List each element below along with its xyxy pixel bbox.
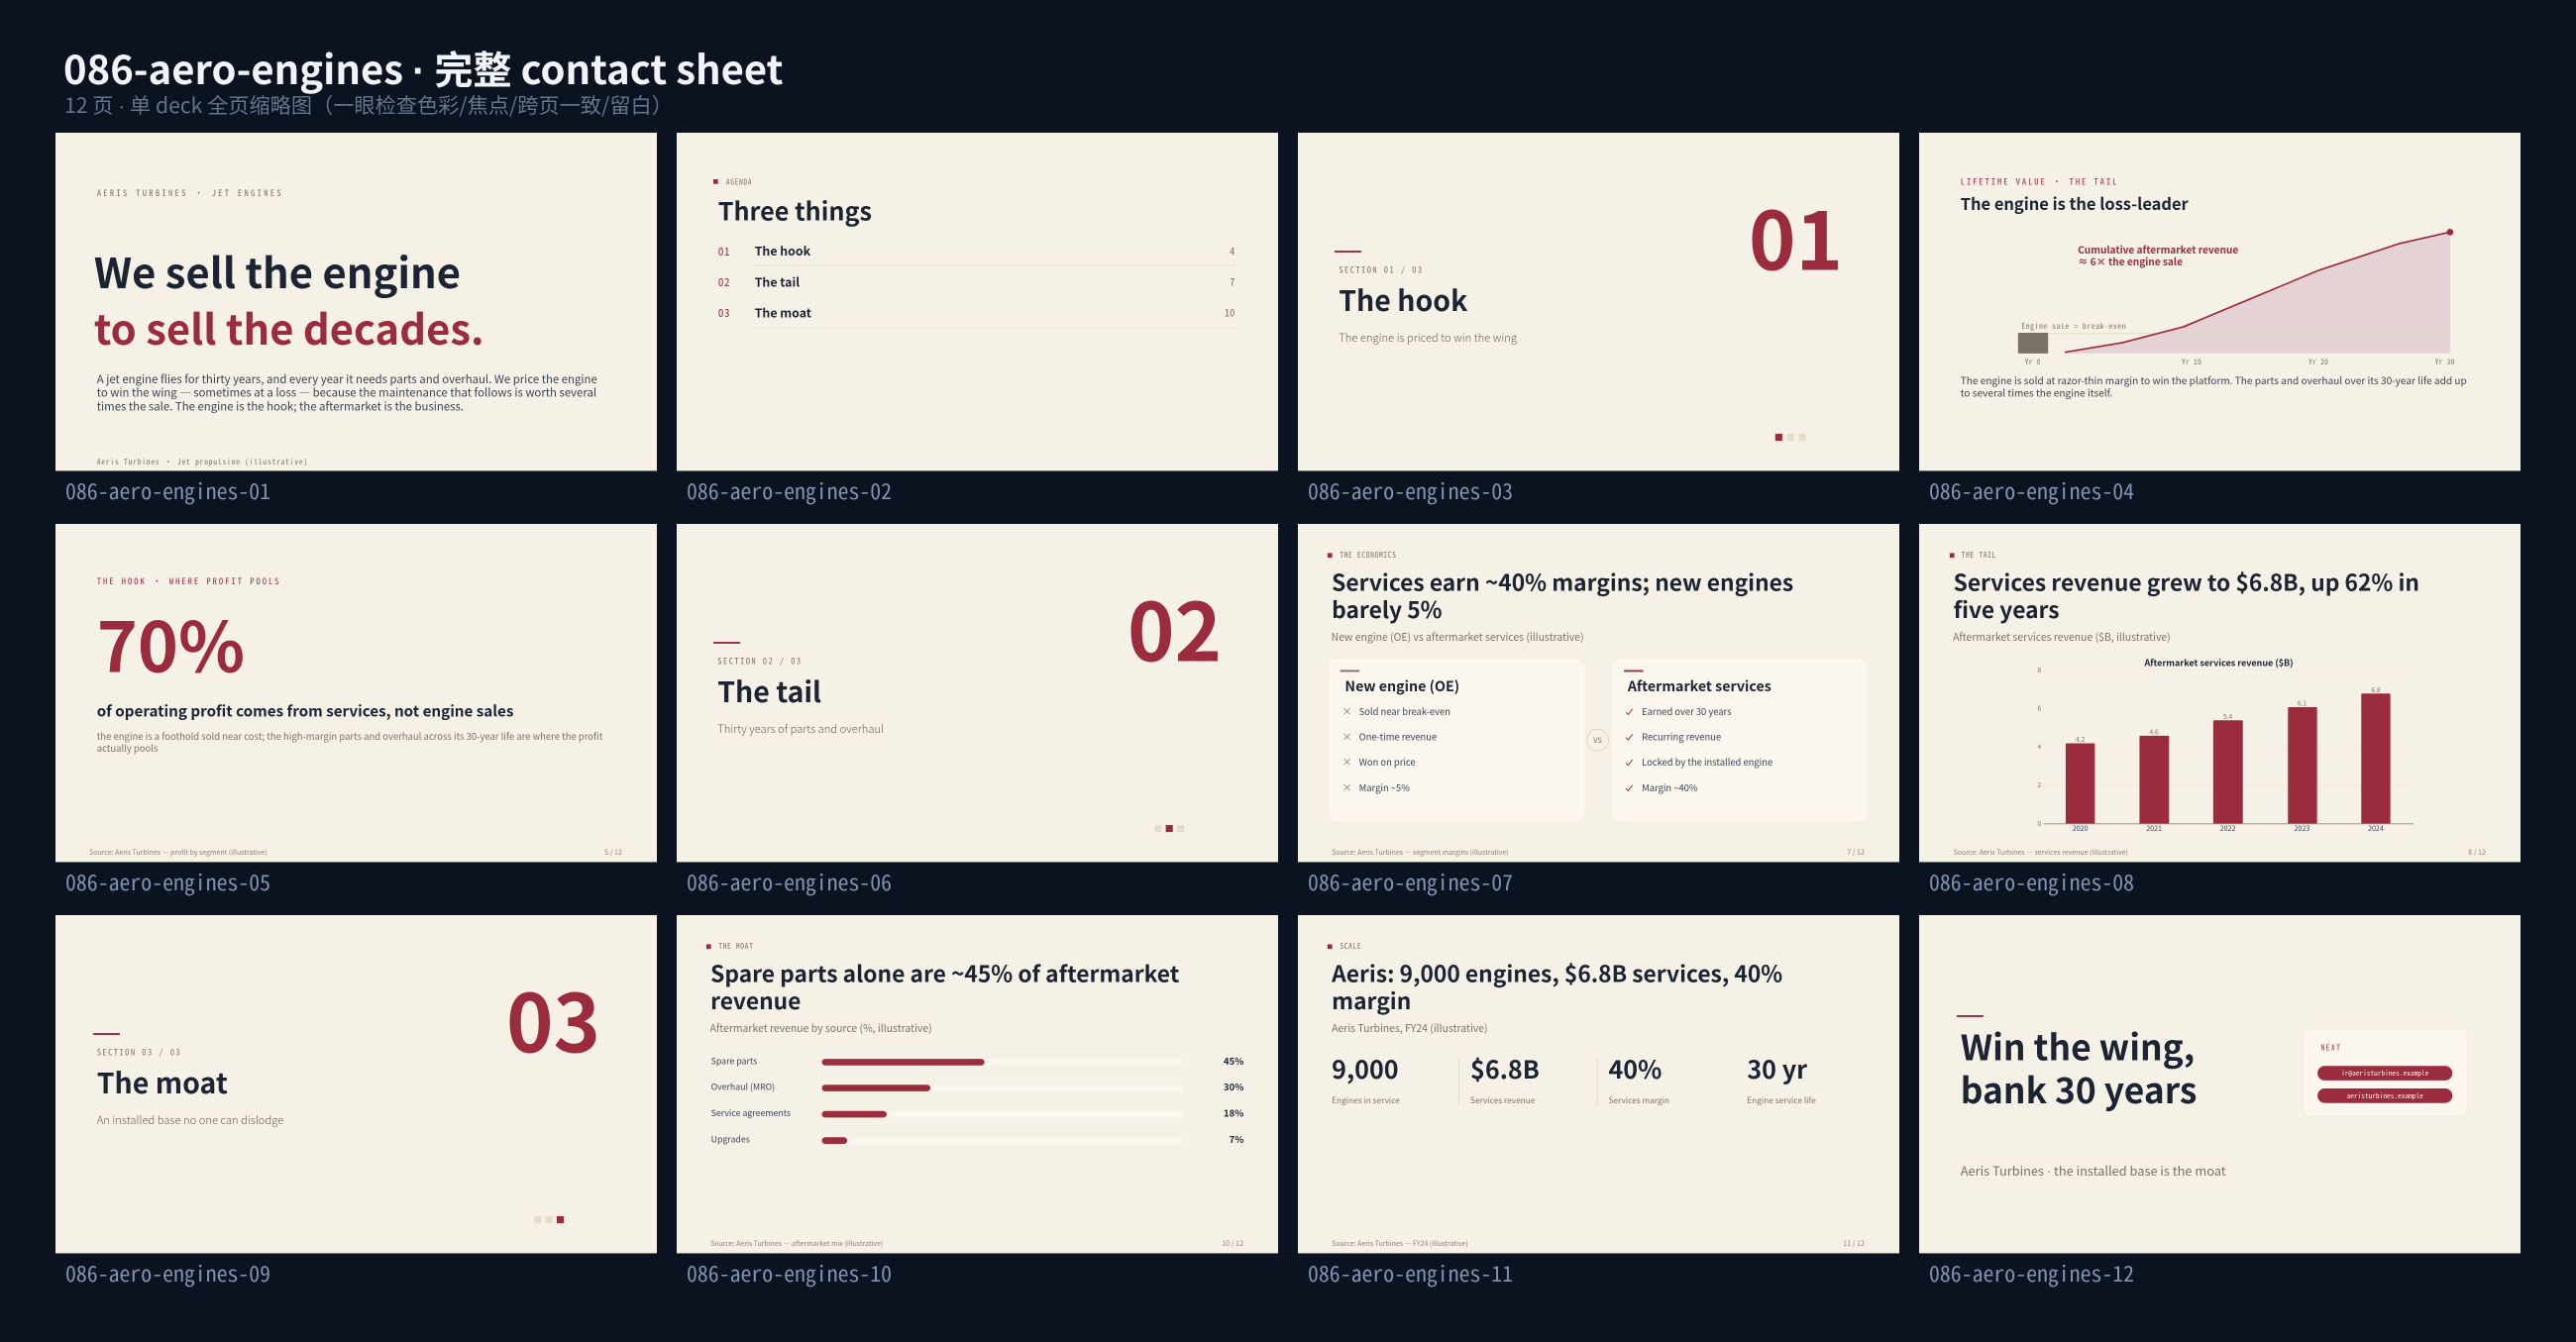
intro paragraph: times the sale. The engine is the hook; the aftermarket is the business. — [97, 397, 464, 414]
eyebrow marker — [1328, 553, 1333, 558]
card accent — [1624, 670, 1644, 671]
source: Source: Aeris Turbines — services revenue (illustrative) — [1954, 847, 2128, 857]
contact pill: web: aeristurbines.example — [2347, 1090, 2423, 1100]
bar chart: 4.6 — [2150, 726, 2159, 736]
progress dots — [534, 1216, 565, 1224]
card accent — [1341, 670, 1359, 671]
eyebrow: THE ECONOMICS — [1340, 549, 1397, 561]
heading — [1332, 565, 1793, 625]
stat: revenue: Services revenue — [1470, 1094, 1535, 1106]
intro paragraph: to win the wing — sometimes at a loss — because the maintenance that follows is worth several — [97, 383, 596, 400]
heading — [710, 956, 1179, 1016]
eyebrow marker — [713, 179, 718, 184]
caption 01: 086-aero-engines-01 — [65, 475, 270, 505]
page number: 8 / 12 — [2468, 847, 2486, 857]
subtitle: 12 页 · 单 deck 全页缩略图（一眼检查色彩/焦点/跨页一致/留白） — [64, 89, 673, 120]
panel: slide 09 section — [55, 915, 657, 1253]
headline — [94, 241, 484, 357]
stat detail: the engine is a foothold sold near cost; the high-margin parts and overhaul across its 30-year life are where the profit — [97, 729, 602, 743]
section label: SECTION 02 / 03 — [717, 655, 803, 667]
section label: SECTION 03 / 03 — [97, 1046, 181, 1058]
section title: The hook — [1339, 278, 1467, 320]
next label: NEXT — [2320, 1042, 2341, 1053]
name: The hook — [755, 242, 810, 259]
caption 02: 086-aero-engines-02 — [687, 475, 892, 505]
stat: revenue: $6.8B — [1470, 1051, 1540, 1086]
page: 10 — [1225, 305, 1234, 320]
heading: Three things — [718, 192, 872, 228]
heading: Services revenue grew to $6.8B, up 62% in — [1954, 565, 2419, 597]
closing headline: Win the wing, — [1961, 1020, 2195, 1071]
area chart: Yr 30 — [2435, 357, 2455, 367]
area chart: ≈ 6× the engine sale — [2078, 254, 2183, 268]
heading — [1332, 956, 1782, 1016]
bar row: overhaul: Overhaul (MRO) — [711, 1081, 775, 1092]
panel: slide 11 key stats — [1298, 915, 1899, 1253]
list item: Locked by the installed engine — [1642, 755, 1772, 769]
eyebrow marker — [706, 944, 711, 949]
bar row: spare parts: 45% — [1224, 1054, 1243, 1068]
intro paragraph: A jet engine flies for thirty years, and every year it needs parts and overhaul. We price the engine — [97, 369, 597, 386]
section subtitle: The engine is priced to win the wing — [1339, 329, 1517, 345]
title: 086-aero-engines · 完整 contact sheet — [63, 39, 783, 96]
eyebrow: LIFETIME VALUE · THE TAIL — [1961, 175, 2118, 187]
list item: Sold near break-even — [1359, 704, 1450, 718]
source: Source: Aeris Turbines — aftermarket mix (illustrative) — [710, 1238, 883, 1248]
big number: 70% — [97, 592, 245, 692]
stat: engines: 9,000 — [1332, 1051, 1399, 1086]
stat: life: 30 yr — [1747, 1051, 1807, 1086]
source: Source: Aeris Turbines — profit by segment (illustrative) — [89, 847, 268, 857]
eyebrow: THE HOOK · WHERE PROFIT POOLS — [97, 575, 281, 587]
caption 04: 086-aero-engines-04 — [1929, 475, 2134, 505]
card: new engine — [1328, 658, 1585, 823]
closing headline: bank 30 years — [1961, 1063, 2197, 1114]
number: 02 — [718, 273, 730, 289]
page number: 10 / 12 — [1222, 1238, 1243, 1248]
bar chart: 8 — [2038, 665, 2042, 674]
progress dots — [1775, 434, 1806, 442]
number: 03 — [718, 304, 730, 320]
accent rule — [1957, 1015, 1984, 1017]
panel: slide 10 horizontal bars — [677, 915, 1278, 1253]
list item: Won on price — [1359, 755, 1416, 769]
stat: revenue — [1470, 1051, 1540, 1106]
stat: margin: 40% — [1608, 1051, 1662, 1086]
area chart: Engine sale = break-even — [2021, 321, 2126, 332]
subheading: Aftermarket services revenue ($B, illustrative) — [1953, 629, 2171, 644]
eyebrow: THE TAIL — [1962, 549, 1996, 561]
bar row: spare parts: Spare parts — [711, 1055, 757, 1067]
bar row: service agreements: Service agreements — [711, 1106, 791, 1119]
panel: slide 08 bar chart — [1919, 524, 2521, 862]
card: aftermarket services — [1610, 658, 1869, 823]
bar chart: 6.8 — [2371, 684, 2381, 694]
caption 07: 086-aero-engines-07 — [1308, 866, 1513, 897]
list item: Earned over 30 years — [1642, 704, 1732, 718]
caption 10: 086-aero-engines-10 — [687, 1258, 892, 1288]
panel: slide 02 agenda — [677, 133, 1278, 470]
page number: 11 / 12 — [1843, 1238, 1865, 1248]
caption 12: 086-aero-engines-12 — [1929, 1258, 2134, 1288]
eyebrow: SCALE — [1340, 940, 1361, 952]
accent rule — [1335, 251, 1361, 253]
list item: One-time revenue — [1359, 730, 1437, 743]
heading: margin — [1332, 982, 1411, 1016]
section number: 01 — [1749, 177, 1843, 293]
bar chart: 0 — [2038, 818, 2042, 828]
subheading: New engine (OE) vs aftermarket services (illustrative) — [1332, 629, 1584, 644]
footer note: Aeris Turbines · Jet propulsion (illustrative) — [97, 456, 308, 466]
closing subtitle: Aeris Turbines · the installed base is the moat — [1961, 1161, 2226, 1180]
bar chart: 2020 — [2073, 824, 2089, 834]
panel: slide 04 lifetime value — [1919, 133, 2521, 470]
bar chart: Aftermarket services revenue ($B) — [2144, 657, 2294, 670]
list item: × — [1342, 780, 1352, 794]
section label: SECTION 01 / 03 — [1339, 263, 1424, 275]
page number: 5 / 12 — [604, 847, 622, 857]
section number: 02 — [1127, 568, 1222, 684]
eyebrow: AERIS TURBINES · JET ENGINES — [97, 187, 283, 199]
stat: margin: Services margin — [1608, 1094, 1669, 1106]
stat: engines: Engines in service — [1332, 1094, 1400, 1106]
heading: five years — [1954, 591, 2060, 625]
stat: margin — [1608, 1051, 1669, 1106]
vs badge — [1586, 729, 1609, 752]
card title: Aftermarket services — [1628, 674, 1771, 695]
card title: New engine (OE) — [1344, 674, 1459, 695]
area chart: Yr 10 — [2182, 357, 2201, 367]
number: 01 — [718, 242, 730, 258]
bar row: upgrades: Upgrades — [711, 1133, 750, 1145]
progress dots — [1154, 824, 1185, 832]
source: Source: Aeris Turbines — segment margins (illustrative) — [1332, 847, 1509, 857]
section number: 03 — [506, 960, 600, 1076]
source: Source: Aeris Turbines — FY24 (illustrative) — [1332, 1238, 1468, 1248]
list item: Margin ~5% — [1359, 780, 1410, 794]
bar chart: 4 — [2038, 742, 2042, 752]
agenda row 3 — [718, 304, 1234, 321]
heading: revenue — [710, 982, 801, 1016]
agenda row 1 — [718, 242, 1234, 259]
bar row: service agreements — [711, 1106, 1244, 1119]
page: 7 — [1230, 274, 1234, 289]
bar row: upgrades: 7% — [1230, 1132, 1243, 1146]
caption 08: 086-aero-engines-08 — [1929, 866, 2134, 897]
page number: 7 / 12 — [1847, 847, 1865, 857]
next steps card — [2303, 1028, 2467, 1116]
chart explanation — [1961, 373, 2467, 400]
stat detail: actually pools — [97, 741, 158, 755]
heading — [1954, 565, 2419, 625]
accent rule — [713, 642, 740, 644]
caption 03: 086-aero-engines-03 — [1308, 475, 1513, 505]
section title: The moat — [97, 1061, 228, 1102]
stat: life: Engine service life — [1747, 1094, 1816, 1106]
heading: The engine is the loss-leader — [1961, 191, 2189, 215]
heading: barely 5% — [1332, 591, 1443, 625]
bar chart: 6 — [2038, 703, 2042, 713]
caption 06: 086-aero-engines-06 — [687, 866, 892, 897]
intro paragraph — [97, 369, 597, 414]
bar chart: 6.1 — [2298, 698, 2307, 708]
bar row: spare parts — [711, 1054, 1244, 1068]
chart explanation: to several times the engine itself. — [1961, 385, 2112, 400]
vs badge: VS — [1593, 734, 1602, 745]
list item: Recurring revenue — [1642, 730, 1721, 743]
stat statement: of operating profit comes from services, not engine sales — [97, 699, 513, 721]
bar chart: 2024 — [2368, 824, 2384, 834]
panel: slide 12 closing — [1919, 915, 2521, 1253]
heading: Services earn ~40% margins; new engines — [1332, 565, 1793, 597]
area chart: Yr 0 — [2025, 357, 2041, 367]
section title: The tail — [717, 670, 821, 711]
caption 09: 086-aero-engines-09 — [65, 1258, 270, 1288]
caption 11: 086-aero-engines-11 — [1308, 1258, 1513, 1288]
area chart — [2017, 229, 2455, 367]
closing headline — [1961, 1020, 2197, 1114]
list item: Margin ~40% — [1642, 780, 1698, 794]
bar chart: 2 — [2038, 779, 2042, 789]
bar chart: 2021 — [2146, 824, 2162, 834]
accent rule — [93, 1033, 120, 1035]
stat detail — [97, 729, 602, 755]
contact pill: web — [2317, 1088, 2452, 1103]
panel: slide 03 section — [1298, 133, 1899, 470]
chart explanation: The engine is sold at razor-thin margin to win the platform. The parts and overhaul over its 30-year life add up — [1961, 373, 2467, 388]
caption 05: 086-aero-engines-05 — [65, 866, 270, 897]
list item: × — [1342, 704, 1352, 718]
stat: life — [1747, 1051, 1816, 1106]
bar chart: 2022 — [2220, 824, 2236, 834]
headline: We sell the engine — [94, 241, 461, 300]
eyebrow marker — [1950, 553, 1955, 558]
list item: × — [1342, 755, 1352, 770]
heading: Aeris: 9,000 engines, $6.8B services, 40% — [1332, 956, 1782, 988]
bar row: service agreements: 18% — [1224, 1106, 1243, 1119]
eyebrow: AGENDA — [726, 176, 752, 187]
panel: slide 07 comparison — [1298, 524, 1899, 862]
bar chart — [2037, 657, 2414, 834]
agenda row 2 — [718, 273, 1234, 290]
contact pill: email: ir@aeristurbines.example — [2341, 1068, 2428, 1079]
stat: engines — [1332, 1051, 1400, 1106]
bar row: upgrades — [711, 1132, 1244, 1146]
area chart: Cumulative aftermarket revenue — [2078, 242, 2238, 257]
section subtitle: An installed base no one can dislodge — [97, 1111, 283, 1127]
area chart: Yr 20 — [2308, 357, 2328, 367]
name: The tail — [755, 273, 800, 290]
bar chart: 2023 — [2295, 824, 2309, 834]
eyebrow: THE MOAT — [718, 940, 753, 952]
bar chart: 5.4 — [2223, 711, 2232, 721]
bar row: overhaul — [711, 1080, 1244, 1093]
list item: × — [1342, 730, 1352, 744]
page: 4 — [1230, 243, 1234, 258]
name: The moat — [755, 304, 811, 321]
contact pill: email — [2317, 1066, 2452, 1081]
bar row: overhaul: 30% — [1224, 1080, 1243, 1093]
subheading: Aeris Turbines, FY24 (illustrative) — [1332, 1020, 1488, 1035]
heading: Spare parts alone are ~45% of aftermarket — [710, 956, 1179, 988]
section subtitle: Thirty years of parts and overhaul — [717, 720, 884, 736]
eyebrow marker — [1328, 944, 1333, 949]
bar chart: 4.2 — [2076, 734, 2086, 744]
panel: slide 01 cover — [55, 133, 657, 470]
panel: slide 06 section — [677, 524, 1278, 862]
headline: to sell the decades. — [94, 297, 484, 357]
panel: slide 05 big stat — [55, 524, 657, 862]
subheading: Aftermarket revenue by source (%, illustrative) — [710, 1020, 932, 1035]
